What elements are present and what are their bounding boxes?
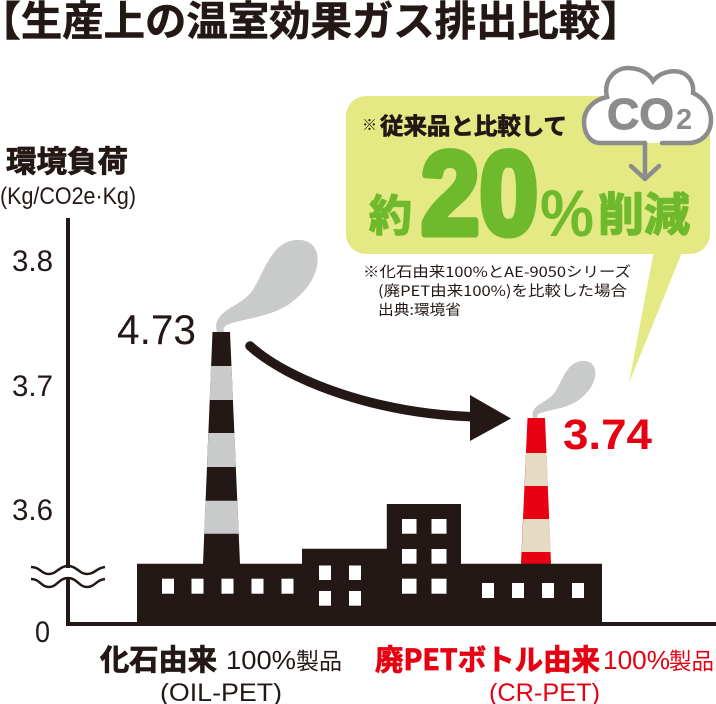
icon: CO2 cloud with down arrow: CO bbox=[607, 90, 674, 139]
axis title bbox=[0, 137, 136, 210]
callout bubble: 従来品と比較して bbox=[380, 107, 567, 141]
footnote: ※化石由来100%とAE-9050シリーズ bbox=[363, 261, 631, 282]
chimney: fossil bbox=[203, 332, 240, 564]
callout main figure: 約 bbox=[369, 182, 412, 244]
footnote bbox=[363, 261, 631, 320]
label: fossil product: 化石由来 bbox=[100, 637, 217, 679]
callout main figure: 削減 bbox=[598, 179, 690, 245]
callout lead text: ※ bbox=[362, 114, 377, 135]
callout main figure: 20 bbox=[421, 128, 538, 260]
label: fossil product: 製品 bbox=[296, 642, 342, 676]
axis tick labels: 0 bbox=[35, 616, 50, 649]
callout main figure bbox=[369, 128, 690, 260]
smoke: fossil chimney bbox=[216, 240, 318, 332]
label: recycled product: 100% bbox=[603, 645, 670, 675]
callout main figure: % bbox=[540, 176, 594, 250]
axis tick labels: 3.8 bbox=[12, 245, 53, 278]
smoke: recycled chimney bbox=[532, 361, 595, 418]
footnote: (廃PET由来100%)を比較した場合 bbox=[378, 280, 628, 301]
value: recycled: 3.74 bbox=[563, 411, 652, 459]
arrow bbox=[250, 346, 511, 441]
footnote: 出典:環境省 bbox=[378, 299, 461, 320]
axis title: (Kg/CO2e·Kg) bbox=[0, 183, 136, 210]
icon: CO2 cloud with down arrow bbox=[584, 68, 711, 179]
chart axes bbox=[31, 218, 716, 626]
label: recycled product: 廃PETボトル由来 bbox=[375, 637, 600, 679]
value: fossil: 4.73 bbox=[117, 306, 196, 353]
label: recycled product bbox=[375, 637, 714, 704]
axis title: 環境負荷 bbox=[6, 137, 128, 181]
axis tick labels bbox=[12, 245, 53, 649]
label: fossil product bbox=[100, 637, 342, 704]
label: fossil product: 100% bbox=[226, 645, 296, 675]
axis tick labels: 3.7 bbox=[12, 370, 53, 403]
callout bubble bbox=[346, 96, 710, 383]
chimney: recycled bbox=[521, 418, 551, 564]
factory building bbox=[137, 504, 602, 624]
icon: CO2 cloud with down arrow: 2 bbox=[676, 104, 692, 136]
axis tick labels: 3.6 bbox=[12, 494, 53, 527]
label: recycled product: 製品 bbox=[669, 642, 714, 676]
